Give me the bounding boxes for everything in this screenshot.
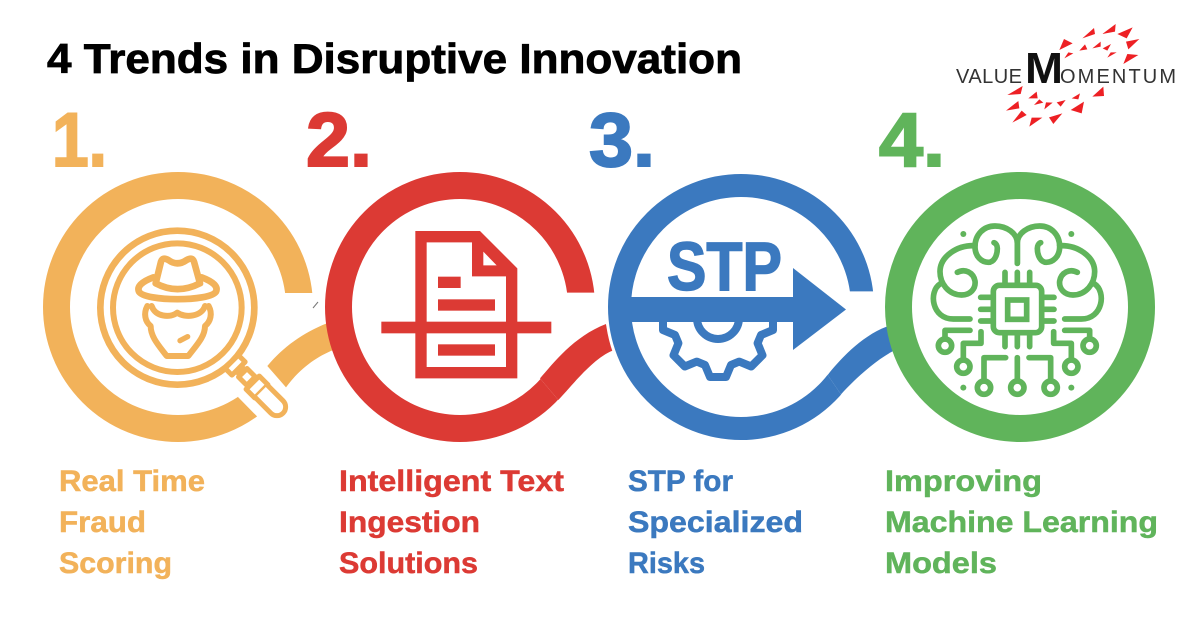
number 4: 4. xyxy=(879,98,945,183)
icon: STP arrow xyxy=(625,228,846,350)
label 1: Fraud xyxy=(59,506,146,539)
logo: ValueMomentum: M xyxy=(1025,44,1063,93)
label 3 xyxy=(628,465,803,580)
icon: scanned document xyxy=(381,231,551,378)
label 4: Machine Learning xyxy=(885,506,1158,539)
label 2 xyxy=(339,465,564,580)
logo: ValueMomentum: VALUE xyxy=(956,66,1022,88)
label 1: Real Time xyxy=(59,465,205,498)
panel: ring 3 with STP arrow xyxy=(605,171,923,443)
label 3: Specialized xyxy=(628,506,803,539)
icon: STP arrow: STP xyxy=(667,228,782,305)
label 4 xyxy=(885,465,1158,580)
logo: ValueMomentum xyxy=(956,24,1176,127)
number 2: 2. xyxy=(306,98,372,183)
label 4: Improving xyxy=(885,465,1042,498)
label 2: Ingestion xyxy=(339,506,480,539)
label 2: Intelligent Text xyxy=(339,465,564,498)
number 3: 3. xyxy=(589,98,655,183)
number 1: 1. xyxy=(52,98,107,183)
logo: ValueMomentum: OMENTUM xyxy=(1060,66,1176,88)
icon: detective in magnifying glass xyxy=(100,231,290,420)
label 1: Scoring xyxy=(59,547,172,580)
icon: gear xyxy=(663,318,773,377)
label 1 xyxy=(59,465,205,580)
label 3: STP for xyxy=(628,465,733,498)
panel: ring 2 with document xyxy=(338,186,643,428)
panel: ring 4 with AI brain xyxy=(898,186,1142,428)
title: 4 Trends in Disruptive Innovation xyxy=(47,35,742,82)
panel: ring 1 with magnifier xyxy=(56,186,333,450)
label 4: Models xyxy=(885,547,997,580)
icon: brain and chip xyxy=(933,226,1101,394)
label 2: Solutions xyxy=(339,547,478,580)
label 3: Risks xyxy=(628,547,705,580)
